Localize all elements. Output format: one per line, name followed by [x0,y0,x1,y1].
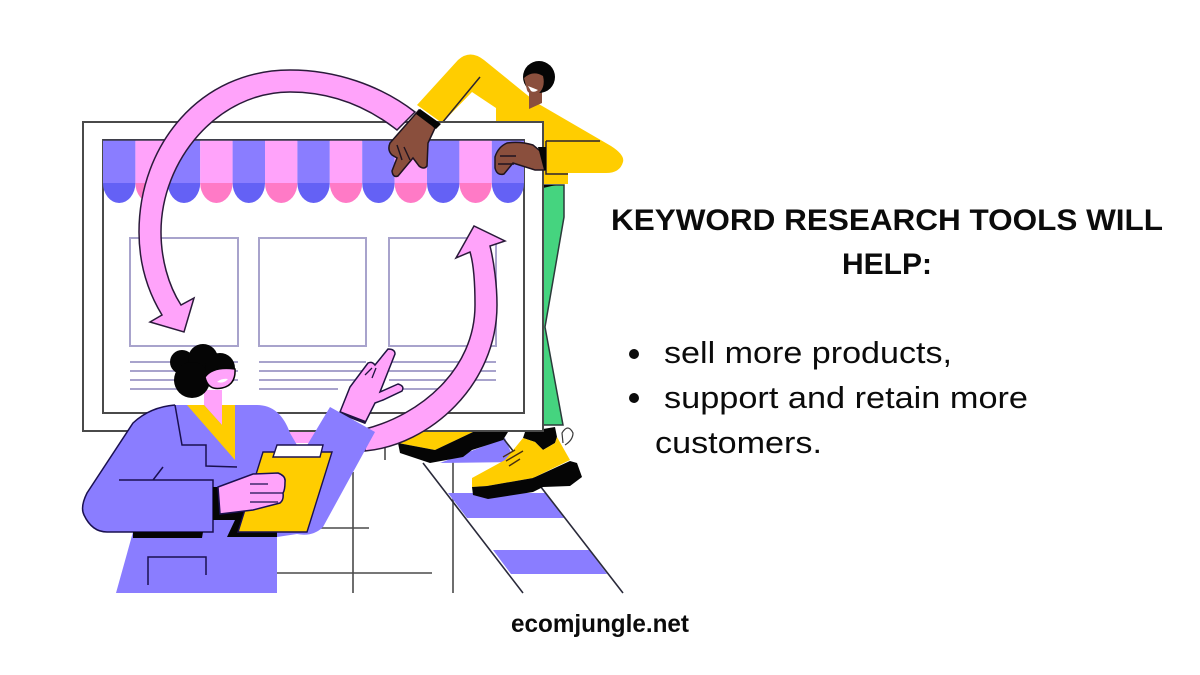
woman neck [204,390,222,425]
resting hand cuff [538,147,546,170]
man shirt [417,54,623,184]
jacket outlines [83,405,237,585]
heading: HELP: [842,248,932,281]
woman raised hand cuff [339,411,366,424]
bullet list [629,335,1028,460]
bullet list: customers. [655,425,822,460]
pointing hand [389,110,435,176]
arrow: bottom cycle arrow [365,226,505,451]
woman face [205,368,235,389]
storefront frame [83,122,543,431]
bullet list: support and retain more [664,380,1028,415]
floor grid lines [277,447,453,593]
man smile [528,86,538,92]
footer website: ecomjungle.net [511,610,690,638]
woman jacket [83,405,375,593]
woman hair [170,344,235,398]
front shoe [472,427,582,499]
man face [524,73,544,95]
woman raised hand [340,349,403,423]
awning [103,140,524,203]
man hands [389,109,546,176]
product placeholders [130,238,496,389]
man trousers [543,185,564,425]
clipboard clip [273,445,323,457]
man sleeve creases [442,77,600,174]
resting hand [495,142,545,174]
woman collar [187,405,235,460]
arrow: top cycle arrow [139,70,415,332]
staircase [423,438,623,593]
woman belt [133,520,277,538]
heading [611,204,1163,281]
woman sleeve cuff [213,487,245,520]
heading: KEYWORD RESEARCH TOOLS WILL [611,204,1163,237]
man neck [529,92,542,109]
arrow tail behind woman [288,432,320,443]
back shoe [398,432,508,463]
clipboard [238,452,332,532]
bullet list: sell more products, [664,335,952,370]
man figure body [417,54,623,425]
woman figure [83,344,403,593]
pointing hand cuff [416,109,441,129]
woman holding hand [218,473,285,514]
man hair [523,61,555,93]
